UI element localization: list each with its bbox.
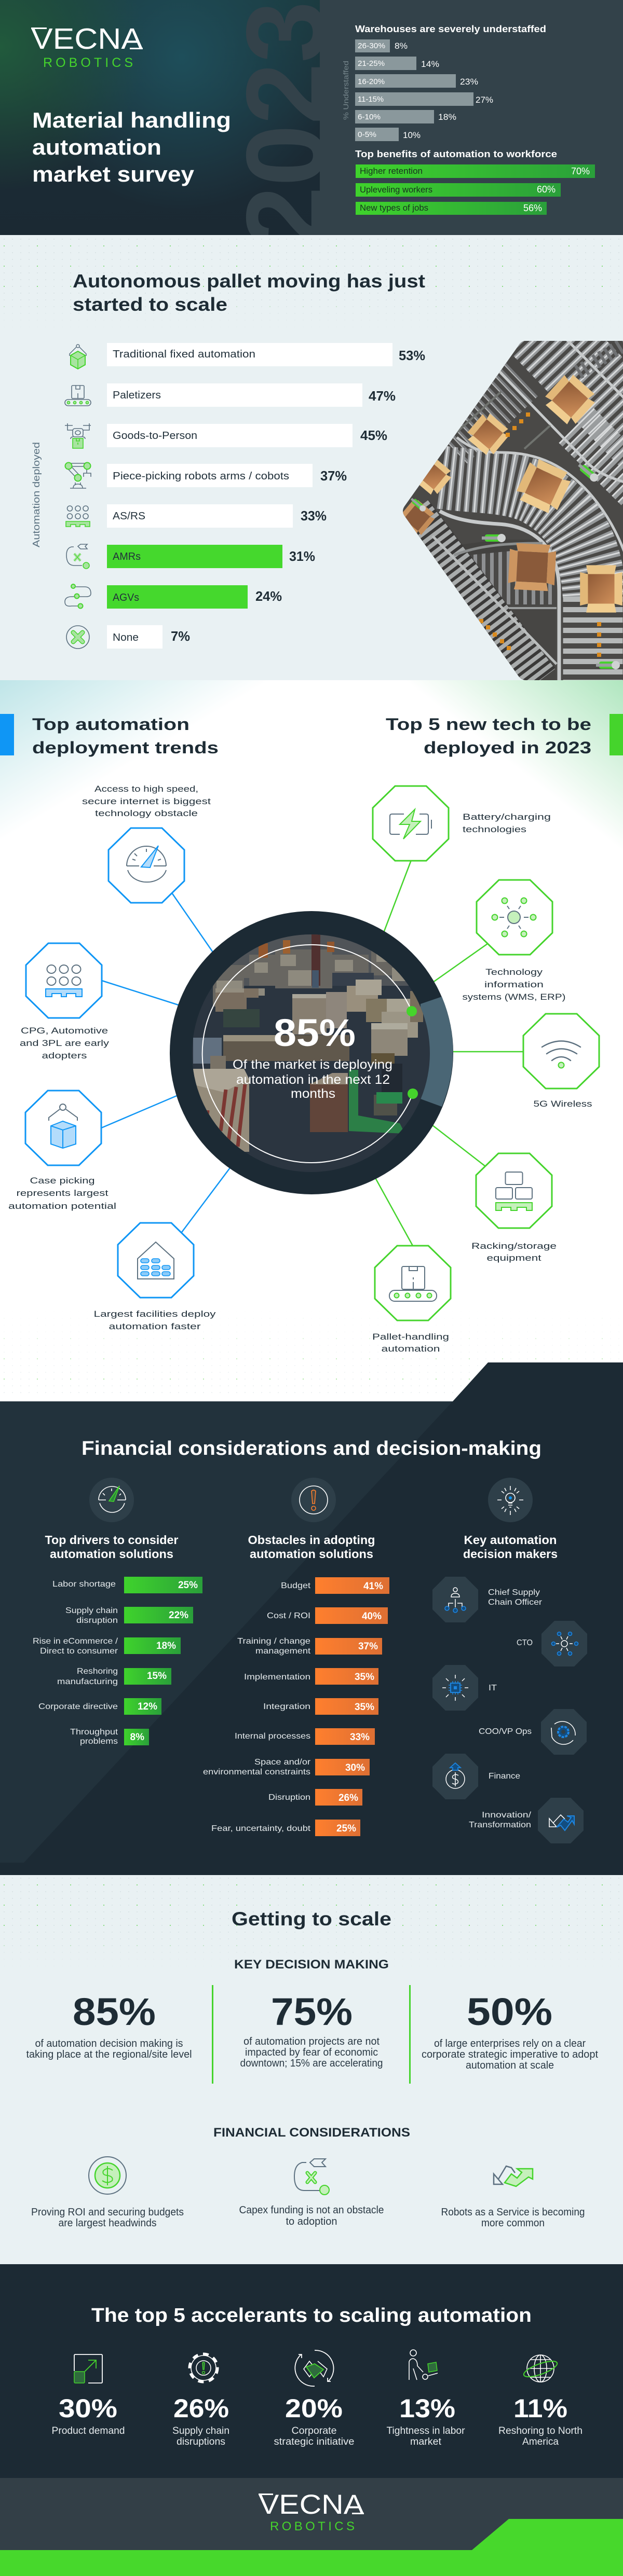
accelerant: supply chain disruptions: 26% [173, 2394, 229, 2423]
caption [462, 967, 566, 1002]
bar chart: automation deployed: Piece-picking robots arms / cobots [113, 471, 289, 482]
label: IT [489, 1684, 497, 1692]
caption: information [484, 980, 544, 989]
lower left diagonal conveyor [410, 514, 537, 682]
subheading: key decision makers: Key automation [464, 1533, 557, 1547]
bar chart: top drivers: Throughput [70, 1728, 118, 1737]
icon: gauge [89, 1478, 134, 1522]
front left crate with stripes [192, 1069, 249, 1152]
chart: top benefits of automation: Higher retention [360, 166, 423, 176]
label: CTO [517, 1638, 533, 1647]
tech: information systems [462, 880, 566, 1002]
caption: 5G Wireless [534, 1099, 592, 1109]
trend: early adopters [20, 943, 110, 1060]
heading: top 5 new tech: Top 5 new tech to be [386, 715, 591, 734]
rails [432, 337, 623, 682]
bar chart: obstacles: 35% [355, 1702, 374, 1713]
trend: largest facilities [93, 1223, 216, 1331]
mid crates [292, 980, 423, 1064]
stat: 50% [422, 1990, 598, 2071]
decision maker: chief supply chain officer [432, 1577, 543, 1622]
panel: getting to scale [0, 1875, 623, 2264]
title: market survey [32, 162, 195, 186]
bar chart: top drivers: 25% [178, 1580, 198, 1591]
chart: top benefits of automation: 56% [523, 203, 542, 213]
bar chart: automation deployed: 33% [301, 508, 327, 524]
bar chart: automation deployed: Traditional fixed automation [113, 349, 255, 360]
icon: AGVs [65, 584, 91, 608]
chart: warehouses understaffed [342, 24, 546, 141]
bar chart: obstacles: Budget [281, 1581, 311, 1590]
right inner field [576, 425, 623, 498]
bar chart: obstacles: Space and/or [254, 1758, 311, 1767]
chart: warehouses understaffed: 0-5% [358, 130, 376, 139]
small orange rollers marks [479, 412, 601, 657]
footer logo: VECNA [259, 2489, 364, 2520]
bar chart: top drivers: Corporate directive [38, 1702, 118, 1711]
heading [73, 270, 425, 315]
bar chart: top drivers: 12% [138, 1701, 157, 1712]
icon: piece picking robot arm [65, 463, 91, 488]
front center crate [310, 1083, 348, 1132]
accelerant: reshoring to north america [498, 2355, 583, 2447]
bar chart: top drivers: Supply chain [65, 1606, 118, 1615]
icon: AMRs [66, 544, 89, 569]
header right panel background [320, 0, 623, 235]
Vecna Robotics logo [31, 22, 143, 70]
subheading: financial considerations: FINANCIAL CONSIDERATIONS [213, 2126, 410, 2140]
bar chart: top drivers: problems [80, 1737, 118, 1746]
caption [463, 812, 551, 834]
white progress arc [202, 945, 413, 1163]
caption [82, 784, 211, 818]
chart: warehouses understaffed: 10% [403, 130, 421, 140]
caption: Largest facilities deploy [93, 1309, 216, 1319]
label [488, 1588, 543, 1607]
bar chart: obstacles [203, 1577, 389, 1836]
caption: represents largest [17, 1188, 109, 1198]
warehouse photo [189, 931, 434, 1175]
stat: 50%: of large enterprises rely on a clear [434, 2038, 586, 2049]
bar chart: obstacles: Integration [263, 1702, 310, 1711]
bar chart: automation deployed: 45% [360, 428, 387, 443]
decision maker: finance [432, 1754, 520, 1799]
text: capex: Capex funding is not an obstacle [239, 2205, 384, 2216]
caption: automation [381, 1344, 440, 1354]
image: conveyor system [403, 341, 623, 680]
green progress dots [407, 1006, 418, 1099]
bar chart: automation deployed: AS/RS [113, 511, 145, 522]
label: Finance [489, 1772, 520, 1781]
bar chart: obstacles: Internal processes [235, 1732, 310, 1741]
footer logo: ROBOTICS [270, 2519, 355, 2533]
bar chart: top drivers: 22% [169, 1610, 188, 1621]
accelerant: reshoring to north america: America [522, 2436, 559, 2447]
stat: 85%: 85% [73, 1990, 156, 2033]
subheading: key decision makers [463, 1533, 558, 1561]
central curved conveyor [441, 477, 594, 597]
stat 85%: automation in the next 12 [236, 1072, 390, 1087]
caption: Access to high speed, [94, 784, 198, 794]
text: robots as a service: more common [481, 2217, 545, 2229]
subheading: obstacles [248, 1533, 375, 1561]
accelerant: tightness in labor market: Tightness in labor [386, 2426, 465, 2436]
subheading: obstacles: automation solutions [250, 1547, 373, 1561]
label: Transformation [469, 1821, 531, 1829]
heading: top 5 new tech: deployed in 2023 [424, 738, 591, 757]
heading: top automation deployment trends: deployment trends [32, 738, 219, 757]
Vecna Robotics logo: VECNA [31, 22, 143, 56]
chart: top benefits of automation [355, 149, 595, 215]
decision maker: innovation transformation [469, 1798, 584, 1843]
panel: financial considerations [0, 1362, 623, 1875]
text: capex [239, 2205, 384, 2227]
stat 85%: Of the market is deploying [233, 1057, 392, 1072]
accelerant: supply chain disruptions [172, 2354, 229, 2447]
caption [8, 1176, 116, 1211]
caption: equipment [487, 1253, 541, 1263]
accelerant: supply chain disruptions: Supply chain [172, 2426, 229, 2436]
accelerant: reshoring to north america: Reshoring to North [498, 2426, 583, 2436]
footer green band [0, 2519, 623, 2576]
top right straight conveyor [530, 316, 623, 441]
tech: 5G wireless [523, 1014, 599, 1109]
caption [372, 1332, 449, 1354]
chart: warehouses understaffed: % Understaffed [342, 61, 350, 120]
bar chart: obstacles: management [255, 1647, 311, 1656]
subheading: key decision makers: decision makers [463, 1547, 558, 1561]
stat 85%: 85% [274, 1011, 356, 1054]
chart: top benefits of automation: 60% [537, 184, 556, 195]
trend: case picking [8, 1091, 116, 1211]
bar chart: automation deployed: None [113, 632, 139, 643]
title [32, 108, 231, 186]
chart: warehouses understaffed: 18% [438, 112, 456, 122]
bar chart: obstacles: 37% [358, 1641, 378, 1652]
bar chart: obstacles: 25% [336, 1823, 356, 1834]
bar chart: automation deployed: 7% [171, 628, 190, 644]
caption [471, 1241, 557, 1263]
bar chart: top drivers: manufacturing [57, 1677, 118, 1686]
stat: 75%: downtown; 15% are accelerating [240, 2058, 383, 2069]
green drive units [410, 462, 620, 669]
central circle [170, 911, 453, 1194]
tech: racking storage [471, 1153, 557, 1263]
label: Innovation/ [482, 1811, 532, 1820]
caption: Technology [485, 967, 543, 977]
bar chart: automation deployed: 24% [255, 588, 282, 604]
subheading: top drivers: automation solutions [50, 1547, 173, 1561]
accelerant: reshoring to north america: 11% [513, 2394, 567, 2423]
bar chart: automation deployed: Goods-to-Person [113, 430, 197, 442]
caption: CPG, Automotive [21, 1026, 108, 1036]
caption: Battery/charging [463, 812, 551, 822]
bar chart: top drivers: Labor shortage [52, 1580, 116, 1589]
stat: 50%: automation at scale [466, 2060, 554, 2071]
subheading: key decision making: KEY DECISION MAKING [234, 1958, 389, 1972]
stat: 50%: 50% [467, 1990, 552, 2033]
text: capex: to adoption [286, 2216, 337, 2227]
accelerant: corporate strategic initiative: 20% [285, 2394, 343, 2423]
ring highlight segment [421, 997, 453, 1107]
bar chart: automation deployed: 37% [320, 468, 347, 484]
accelerant: corporate strategic initiative [274, 2350, 354, 2447]
text: robots as a service [441, 2207, 585, 2229]
title: Material handling [32, 108, 231, 132]
caption: Pallet-handling [372, 1332, 449, 1342]
bar chart: obstacles: Training / change [237, 1637, 310, 1646]
heading: top 5 new tech [386, 715, 591, 757]
connector lines green [374, 860, 523, 1246]
icon: AS/RS [66, 506, 90, 527]
icon: exclamation [291, 1478, 336, 1522]
heading: Getting to scale [232, 1908, 391, 1930]
bar chart: top drivers: disruption [76, 1616, 118, 1625]
text: robots as a service: Robots as a Service is becoming [441, 2207, 585, 2218]
caption: Case picking [30, 1176, 94, 1186]
chart: warehouses understaffed: 21-25% [358, 59, 385, 68]
panel: deployment trends and new tech [0, 680, 623, 1393]
chart: warehouses understaffed: 8% [395, 41, 408, 51]
heading: top automation deployment trends: Top automation [32, 715, 189, 734]
caption: adopters [42, 1051, 87, 1060]
stat: 85%: taking place at the regional/site level [26, 2049, 192, 2060]
bar chart: obstacles: Implementation [244, 1673, 310, 1682]
panel: top 5 accelerants [0, 2264, 623, 2478]
accelerant: product demand: Product demand [52, 2426, 125, 2436]
label: COO/VP Ops [479, 1727, 532, 1736]
stat: 75% [240, 1990, 383, 2069]
caption: technologies [463, 824, 526, 834]
bar chart: top drivers: 18% [156, 1641, 176, 1651]
bar chart: automation deployed: 31% [289, 548, 315, 564]
caption: systems (WMS, ERP) [462, 992, 566, 1002]
stat: 75%: of automation projects are not [243, 2036, 380, 2047]
stat: 50%: corporate strategic imperative to adopt [422, 2049, 598, 2060]
bar chart: top drivers: Reshoring [77, 1667, 118, 1676]
accent block green [610, 714, 623, 755]
title: automation [32, 135, 161, 159]
icon: traditional fixed automation [70, 345, 86, 369]
chart: top benefits of automation: Upleveling workers [360, 185, 432, 195]
decision maker: IT [432, 1665, 497, 1711]
icon: light bulb [488, 1478, 533, 1522]
bar chart: automation deployed: AMRs [113, 551, 141, 562]
bar chart: top drivers: 8% [130, 1732, 144, 1743]
bar chart: obstacles: 40% [362, 1611, 382, 1622]
chart: warehouses understaffed: 23% [460, 77, 478, 87]
chart: warehouses understaffed: 6-10% [358, 113, 381, 121]
tech: pallet handling [372, 1246, 451, 1354]
icon: none [66, 626, 89, 649]
bar chart: automation deployed: Paletizers [113, 390, 161, 401]
label [469, 1811, 532, 1829]
caption: Racking/storage [471, 1241, 557, 1251]
caption: automation faster [109, 1321, 201, 1331]
caption: technology obstacle [95, 808, 198, 818]
stat 85% [233, 1011, 392, 1101]
left crates [193, 988, 349, 1071]
accelerant: corporate strategic initiative: Corporate [292, 2426, 336, 2436]
accelerant: corporate strategic initiative: strategic initiative [274, 2436, 354, 2447]
caption: automation potential [8, 1201, 116, 1211]
chart: top benefits of automation: Top benefits of automation to workforce [355, 149, 557, 159]
text: proving ROI: are largest headwinds [58, 2217, 157, 2229]
inner wedge rollers [458, 547, 552, 680]
label: Chief Supply [488, 1588, 540, 1597]
bar chart: automation deployed: 53% [399, 348, 425, 363]
bar chart: top drivers: Rise in eCommerce / [33, 1637, 118, 1646]
icon: capex [294, 2159, 329, 2195]
cardboard boxes [397, 370, 622, 613]
bar chart: automation deployed [107, 343, 425, 649]
far corner conveyor [576, 332, 623, 374]
bar chart: obstacles: Fear, uncertainty, doubt [211, 1824, 311, 1833]
stat: 85% [26, 1990, 192, 2060]
subheading: obstacles: Obstacles in adopting [248, 1533, 375, 1547]
bar chart: obstacles: 41% [363, 1581, 383, 1592]
stat: 75%: 75% [271, 1990, 353, 2033]
accelerant: supply chain disruptions: disruptions [177, 2436, 225, 2447]
heading: The top 5 accelerants to scaling automation [91, 2305, 532, 2326]
heading: Financial considerations and decision-making [82, 1438, 541, 1459]
bar chart: automation deployed: AGVs [113, 592, 139, 603]
chart: warehouses understaffed: 16-20% [358, 77, 385, 86]
accelerant: tightness in labor market: 13% [399, 2394, 455, 2423]
bar chart: automation deployed: 47% [369, 388, 396, 404]
icon: robots as a service [494, 2166, 533, 2186]
forklift [349, 1064, 405, 1134]
accent block blue [0, 714, 14, 755]
stat: 85%: of automation decision making is [35, 2038, 183, 2049]
heading: started to scale [73, 294, 227, 315]
caption [93, 1309, 216, 1331]
bar chart: obstacles: 26% [338, 1793, 358, 1803]
caption: secure internet is biggest [82, 796, 211, 806]
header panel [0, 0, 623, 248]
chart: warehouses understaffed: 26-30% [358, 42, 385, 50]
chart: top benefits of automation: New types of jobs [360, 203, 428, 213]
decision maker: CTO [517, 1621, 587, 1666]
accelerant: product demand [52, 2354, 125, 2436]
icon: goods to person [65, 423, 91, 448]
caption [20, 1026, 110, 1060]
label: Chain Officer [488, 1598, 543, 1607]
icon: coin [89, 2157, 126, 2194]
header left gradient background [0, 0, 320, 235]
accelerant: tightness in labor market: market [410, 2436, 442, 2447]
accelerant: product demand: 30% [59, 2394, 117, 2423]
chart: warehouses understaffed: 14% [421, 59, 439, 69]
heading: top automation deployment trends [32, 715, 219, 757]
stat 85%: months [291, 1086, 335, 1101]
bar chart: obstacles: Disruption [268, 1793, 310, 1802]
bar chart: obstacles: environmental constraints [203, 1768, 310, 1776]
Vecna Robotics logo: ROBOTICS [43, 56, 133, 70]
text: proving ROI [31, 2207, 184, 2229]
panel: autonomous pallet moving [0, 235, 623, 685]
year watermark 2023: 2023 [223, 1, 348, 248]
bar chart: top drivers: Direct to consumer [40, 1647, 118, 1656]
subheading: top drivers [45, 1533, 179, 1561]
bar chart: top drivers [33, 1577, 202, 1746]
footer logo [259, 2489, 364, 2533]
icon: palletizers [65, 385, 91, 406]
bottom straight conveyor [563, 597, 623, 685]
bar chart: obstacles: 30% [345, 1762, 365, 1773]
bar chart: obstacles: 35% [355, 1672, 374, 1683]
middle diagonal conveyor [451, 376, 524, 446]
chart: top benefits of automation: 70% [571, 166, 590, 176]
bar chart: obstacles: Cost / ROI [267, 1611, 310, 1620]
subheading: top drivers: Top drivers to consider [45, 1533, 179, 1547]
decision maker: COO / VP Ops [479, 1709, 587, 1755]
chart: warehouses understaffed: 11-15% [358, 95, 384, 104]
axis label: Automation deployed [31, 442, 42, 547]
chart: warehouses understaffed: 27% [476, 95, 493, 105]
tech: battery charging [373, 786, 551, 861]
connector lines blue [101, 893, 232, 1232]
text: proving ROI: Proving ROI and securing budgets [31, 2207, 184, 2218]
heading: Autonomous pallet moving has just [73, 270, 425, 292]
bar chart: top drivers: 15% [147, 1671, 167, 1682]
trend: internet access [82, 784, 211, 903]
divider lines [212, 1985, 411, 2084]
stat: 75%: impacted by fear of economic [245, 2047, 378, 2058]
chart: warehouses understaffed: Warehouses are severely understaffed [355, 24, 546, 34]
bar chart: obstacles: 33% [350, 1732, 370, 1743]
footer [0, 2478, 623, 2576]
caption: and 3PL are early [20, 1038, 110, 1048]
accelerant: tightness in labor market [386, 2350, 465, 2447]
